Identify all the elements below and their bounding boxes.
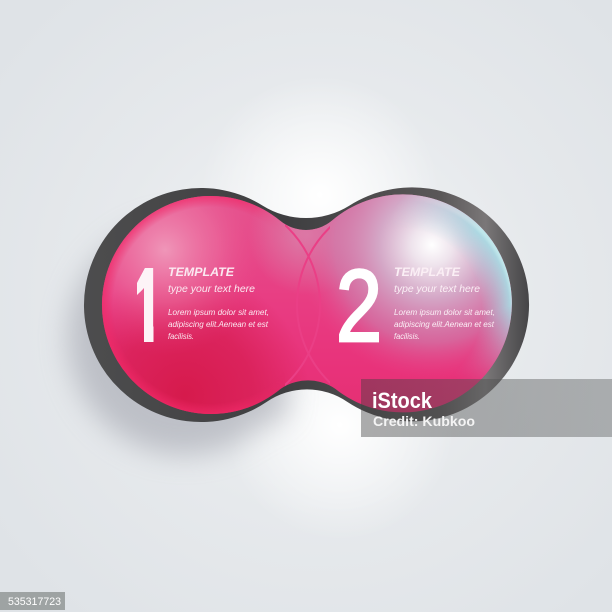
body 1: adipiscing elit.Aenean et est bbox=[168, 320, 269, 329]
image id tag: 535317723 bbox=[8, 596, 61, 608]
body 1 bbox=[168, 308, 269, 341]
body 2 bbox=[394, 308, 495, 341]
drop shadow bbox=[68, 221, 288, 455]
body 1: Lorem ipsum dolor sit amet, bbox=[168, 308, 269, 317]
body 2: Lorem ipsum dolor sit amet, bbox=[394, 308, 495, 317]
overlap arcs bbox=[285, 224, 330, 386]
text block 1 bbox=[168, 267, 269, 341]
watermark panel bbox=[361, 379, 612, 437]
body 1: facilisis. bbox=[168, 332, 194, 341]
body 2: adipiscing elit.Aenean et est bbox=[394, 320, 495, 329]
left sphere shading bbox=[106, 293, 292, 414]
heading 1: TEMPLATE bbox=[168, 267, 234, 279]
watermark credit: Credit: Kubkoo bbox=[373, 413, 475, 429]
dark outer rim bbox=[84, 187, 529, 422]
body 2: facilisis. bbox=[394, 332, 420, 341]
number 2: 2 bbox=[336, 249, 382, 363]
infographic body bbox=[84, 187, 530, 422]
heading 2: TEMPLATE bbox=[394, 267, 460, 279]
image id tag bbox=[0, 592, 65, 610]
pink inner shape bbox=[102, 194, 512, 414]
right sphere shading bbox=[322, 194, 512, 368]
watermark logo: iStock bbox=[372, 388, 433, 413]
subheading 1: type your text here bbox=[168, 284, 255, 295]
number 1: 1 bbox=[122, 244, 164, 365]
neck highlight bbox=[258, 210, 341, 286]
subheading 2: type your text here bbox=[394, 284, 480, 295]
text block 2 bbox=[394, 267, 495, 341]
